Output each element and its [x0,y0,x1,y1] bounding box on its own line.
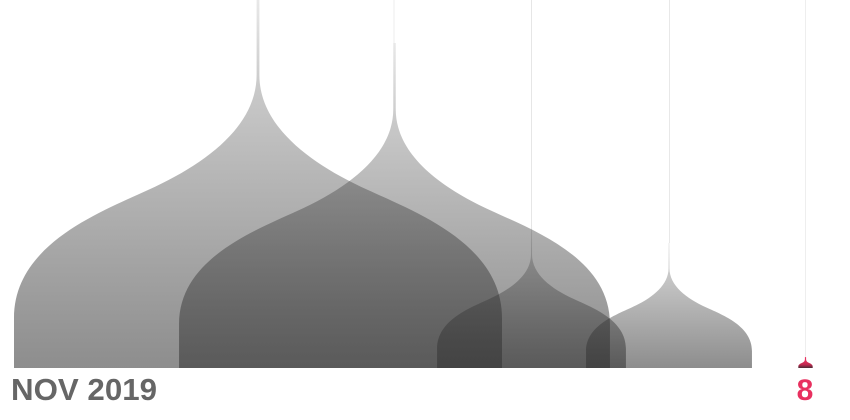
value label: 8 [797,374,813,407]
date label: NOV 2019 [11,372,157,407]
dome 5 highlighted [798,0,813,368]
dome 3 [437,0,626,368]
dome 2 [179,0,610,368]
dome 4 [586,0,752,368]
dome 1 [14,0,502,368]
